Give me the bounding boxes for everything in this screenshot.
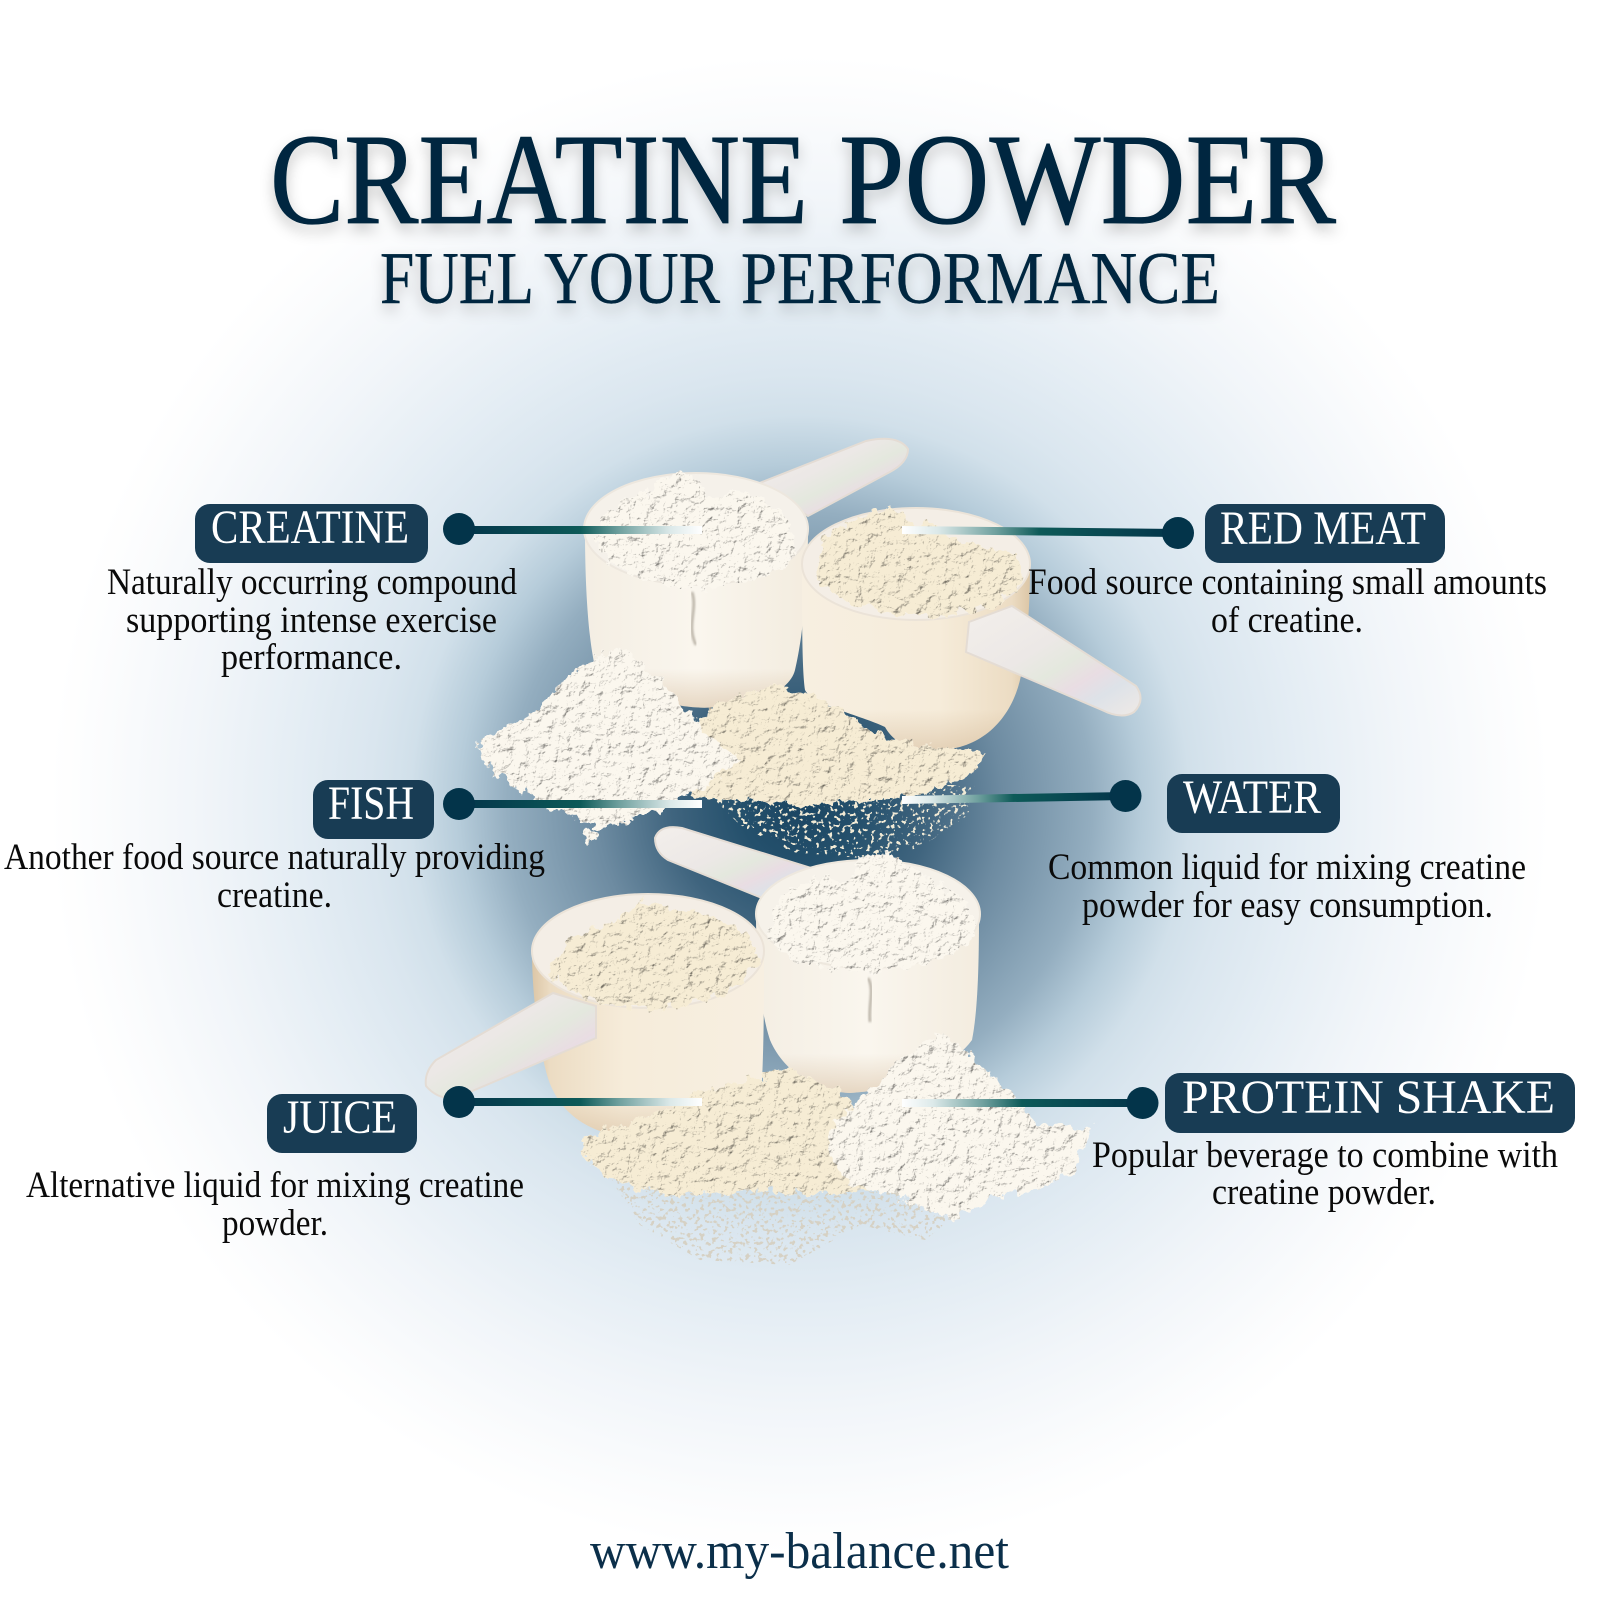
label pill: red meat: [1205, 504, 1445, 563]
connector: creatine: [443, 513, 702, 545]
description: red meat: Food source containing small amounts: [1028, 562, 1547, 603]
description: water: [1048, 847, 1526, 926]
callout: creatine: [107, 501, 517, 678]
scoop: bottom right with white powder: [655, 827, 980, 1093]
powder pile: bottom: [582, 1033, 1092, 1222]
description: creatine: [107, 562, 517, 678]
title: CREATINE: [270, 108, 808, 252]
label text: protein shake: PROTEIN SHAKE: [1182, 1071, 1555, 1124]
label text: fish: FISH: [328, 777, 414, 830]
scoop: top right with cream powder: [802, 506, 1141, 750]
description: juice: Alternative liquid for mixing creatine: [26, 1165, 524, 1206]
connector: protein shake: [902, 1087, 1158, 1119]
label text: creatine: CREATINE: [211, 501, 409, 554]
description: water: powder for easy consumption.: [1082, 885, 1493, 926]
subtitle: [380, 238, 1220, 320]
connector: water: [902, 780, 1142, 812]
connector: fish: [443, 788, 702, 820]
description: red meat: of creatine.: [1211, 600, 1363, 641]
callout: water: [1048, 771, 1526, 926]
description: protein shake: creatine powder.: [1212, 1172, 1436, 1213]
label pill: fish: [313, 780, 434, 839]
label text: red meat: RED MEAT: [1220, 502, 1426, 555]
connector: red meat: [902, 517, 1194, 549]
connector: juice: [443, 1086, 702, 1118]
description: protein shake: Popular beverage to combine with: [1092, 1135, 1558, 1176]
title: [270, 108, 1336, 252]
description: fish: Another food source naturally providing: [4, 837, 545, 878]
label text: juice: JUICE: [283, 1091, 397, 1144]
description: creatine: supporting intense exercise: [126, 600, 497, 641]
footer url: www.my-balance.net: [590, 1523, 1010, 1580]
description: creatine: Naturally occurring compound: [107, 562, 517, 603]
description: water: Common liquid for mixing creatine: [1048, 847, 1526, 888]
callout: red meat: [1028, 502, 1547, 641]
callout: fish: [4, 777, 545, 916]
description: fish: creatine.: [217, 875, 332, 916]
description: red meat: [1028, 562, 1547, 641]
description: creatine: performance.: [221, 637, 402, 678]
description: juice: powder.: [222, 1203, 328, 1244]
callout: juice: [26, 1091, 524, 1244]
label pill: creatine: [195, 504, 428, 563]
label text: water: WATER: [1183, 771, 1321, 824]
scoop: bottom left with cream powder: [426, 894, 764, 1137]
speckles: bottom powder: [605, 1170, 1000, 1265]
label pill: juice: [267, 1094, 417, 1153]
subtitle: FUEL: [380, 238, 534, 320]
powder pile: top: [475, 648, 985, 844]
speckles: top powder: [700, 785, 975, 858]
scoop: top left with white powder: [584, 439, 908, 708]
description: protein shake: [1092, 1135, 1558, 1213]
subtitle: PERFORMANCE: [741, 238, 1220, 320]
subtitle: YOUR: [544, 238, 721, 320]
label pill: water: [1167, 774, 1340, 833]
description: juice: [26, 1165, 524, 1244]
description: fish: [4, 837, 545, 916]
label pill: protein shake: [1165, 1073, 1575, 1133]
callout: protein shake: [1092, 1071, 1575, 1213]
title: POWDER: [839, 108, 1336, 252]
